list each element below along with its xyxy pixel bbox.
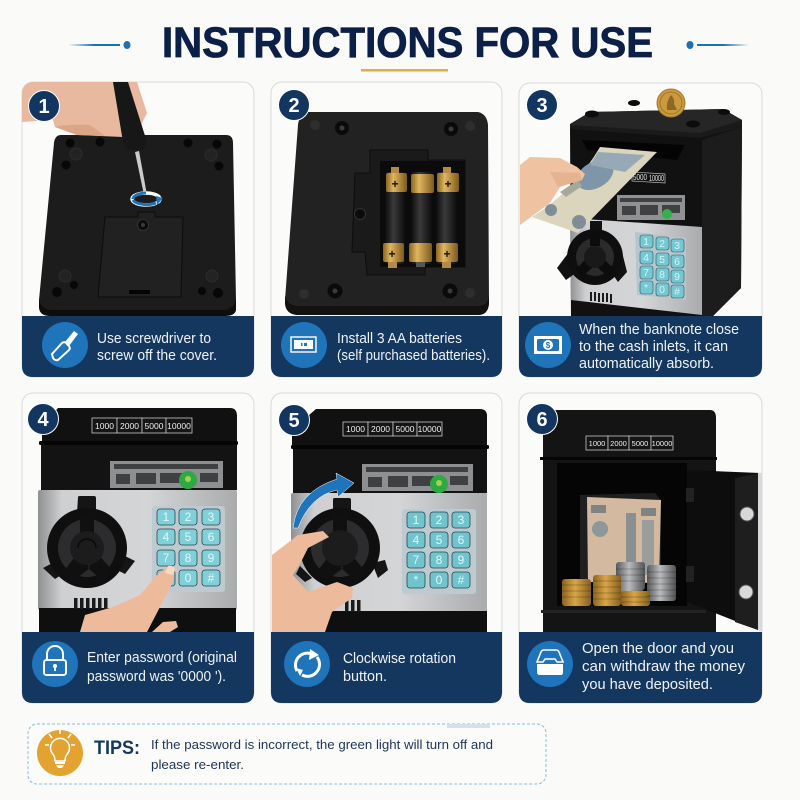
tips text [151, 737, 493, 772]
step 2 caption text: (self purchased batteries). [337, 348, 490, 364]
title right ornament [686, 41, 749, 49]
dial [296, 498, 388, 588]
denomination labels [632, 172, 665, 183]
keypad: 0 [436, 573, 443, 587]
title header [68, 20, 749, 72]
step 2 caption text: Install 3 AA batteries [337, 331, 462, 347]
step 5 caption text: Clockwise rotation [343, 651, 456, 667]
battery left [383, 167, 407, 268]
keypad [152, 506, 225, 592]
keypad: 5 [659, 254, 665, 266]
tips label: TIPS: [94, 737, 140, 759]
keypad: 3 [674, 240, 680, 252]
keypad: 8 [436, 553, 443, 567]
keypad: 2 [659, 238, 665, 250]
icon: light bulb [37, 730, 83, 776]
open door [686, 470, 763, 632]
denomination labels: 1000 [589, 439, 605, 448]
battery right [436, 167, 459, 268]
clockwise arrow [293, 473, 354, 528]
keypad: 7 [413, 553, 420, 567]
panel: step 6 [519, 393, 763, 703]
keypad [635, 232, 686, 300]
title left ornament [68, 41, 130, 49]
open piggy bank [540, 410, 717, 632]
piggy bank front [38, 408, 238, 632]
hand holding screwdriver [22, 82, 147, 195]
keypad: 5 [185, 530, 192, 544]
keypad: 4 [163, 530, 170, 544]
step 6 number badge: 6 [536, 409, 548, 431]
keypad: 2 [436, 513, 443, 527]
keypad [402, 509, 476, 594]
denomination labels: 1000 [346, 424, 365, 434]
piggy bank front [291, 409, 489, 632]
denomination labels: 5000 [633, 172, 647, 182]
battery left: + [391, 177, 399, 191]
keypad: 7 [163, 551, 170, 565]
step 5 number badge: 5 [288, 410, 300, 432]
keypad: 1 [163, 510, 170, 524]
panel: step 5 [271, 393, 502, 703]
battery middle [409, 172, 434, 267]
denomination labels: 10000 [652, 439, 672, 448]
denomination labels: 2000 [610, 439, 627, 448]
denomination labels [343, 422, 442, 436]
denomination labels [586, 436, 673, 450]
gold coin [657, 89, 685, 117]
icon: open drawer [527, 641, 573, 687]
dial [557, 221, 627, 285]
step 1 number badge: 1 [38, 96, 50, 118]
display strip [110, 461, 223, 489]
keypad: 9 [674, 271, 680, 283]
step 2 number badge: 2 [288, 95, 300, 117]
keypad: 4 [643, 252, 649, 264]
tips text: please re-enter. [151, 757, 244, 772]
keypad: 6 [458, 533, 465, 547]
step 5 number badge [278, 404, 310, 436]
denomination labels: 2000 [371, 424, 390, 434]
keypad: 7 [643, 267, 649, 279]
icon: rotation arrows [284, 641, 330, 687]
step 4 caption banner [22, 632, 254, 703]
title underline [361, 69, 448, 72]
keypad: 4 [413, 533, 420, 547]
keypad: * [644, 282, 648, 294]
step 1 caption banner [22, 316, 254, 377]
step 5 caption text: button. [343, 669, 387, 685]
step 3 number badge [526, 90, 558, 120]
keypad: 6 [208, 530, 215, 544]
icon: screwdriver [42, 322, 88, 368]
step 6 number badge [526, 404, 558, 434]
keypad: 9 [458, 553, 465, 567]
denomination labels: 10000 [418, 424, 442, 434]
battery right: + [444, 177, 452, 191]
hand turning dial [272, 531, 353, 632]
icon: battery card [281, 322, 327, 368]
denomination labels: 1000 [95, 421, 114, 431]
keypad: # [208, 571, 215, 585]
step 5 caption text [343, 651, 456, 685]
hand pressing key [80, 566, 178, 632]
step 3 caption text [579, 322, 739, 372]
step 3 caption text: When the banknote close [579, 322, 739, 338]
step 4 caption text [87, 650, 237, 685]
speaker grille [345, 600, 360, 612]
device underside with cover [39, 135, 236, 316]
step 2 number badge [278, 90, 310, 120]
denomination labels: 10000 [167, 421, 191, 431]
speaker grille [74, 598, 108, 609]
denomination labels [92, 418, 192, 433]
step 4 number badge [28, 404, 58, 434]
display strip [617, 195, 685, 220]
coin stacks [562, 562, 676, 606]
step 4 number badge: 4 [37, 409, 49, 431]
panel: step 1 [22, 82, 254, 377]
keypad: 6 [674, 256, 680, 268]
step 3 number badge: 3 [536, 95, 548, 117]
icon: banknote: $ [546, 341, 551, 350]
hand holding banknote [520, 157, 585, 225]
denomination labels: 2000 [120, 421, 139, 431]
keypad: 8 [185, 551, 192, 565]
step 2 caption banner [271, 316, 502, 377]
battery right: + [443, 247, 451, 261]
panel: step 2 [271, 82, 502, 377]
step 3 caption text: automatically absorb. [579, 356, 714, 372]
icon: banknote [525, 322, 571, 368]
step 6 caption banner [519, 632, 762, 703]
keypad: 5 [436, 533, 443, 547]
device underside with battery compartment [285, 112, 489, 315]
step 6 caption text [582, 641, 746, 693]
step 4 caption text: password was '0000 '). [87, 669, 226, 685]
dial [43, 496, 135, 588]
step 1 caption text [97, 331, 217, 364]
stack of banknotes [580, 493, 661, 583]
keypad: 0 [185, 571, 192, 585]
battery left: + [388, 247, 396, 261]
keypad: 9 [208, 551, 215, 565]
three AA batteries [383, 167, 459, 268]
denomination labels: 5000 [145, 421, 164, 431]
step 6 caption text: can withdraw the money [582, 659, 746, 675]
display strip [362, 464, 473, 493]
step 6 caption text: you have deposited. [582, 677, 713, 693]
denomination labels: 5000 [632, 439, 648, 448]
step 2 caption text [337, 331, 490, 364]
icon: padlock [32, 641, 78, 687]
keypad: 8 [659, 269, 665, 281]
step 1 caption text: screw off the cover. [97, 348, 217, 364]
piggy bank at angle [557, 100, 742, 318]
keypad: 1 [413, 513, 420, 527]
step 3 caption text: to the cash inlets, it can [579, 339, 728, 355]
keypad: 1 [643, 236, 649, 248]
keypad: # [458, 573, 465, 587]
step 6 caption text: Open the door and you [582, 641, 734, 657]
step 1 number badge [28, 90, 60, 122]
speaker grille [590, 292, 612, 303]
keypad: * [414, 573, 419, 587]
keypad: 3 [208, 510, 215, 524]
keypad: 3 [458, 513, 465, 527]
title text: INSTRUCTIONS FOR USE [162, 20, 653, 67]
keypad: 2 [185, 510, 192, 524]
step 5 caption banner [271, 632, 502, 703]
step 3 caption banner [519, 316, 762, 377]
keypad: 0 [659, 284, 665, 296]
step 1 caption text: Use screwdriver to [97, 331, 211, 347]
denomination labels: 5000 [396, 424, 415, 434]
step 4 caption text: Enter password (original [87, 650, 237, 666]
rotation arrow [132, 193, 163, 205]
banknote [532, 147, 657, 233]
keypad: # [674, 286, 680, 298]
panel: step 3 [519, 83, 762, 377]
panel: step 4 [22, 393, 254, 703]
tips callout [28, 724, 546, 784]
denomination labels: 10000 [649, 173, 664, 183]
tips text: If the password is incorrect, the green light will turn off and [151, 737, 493, 752]
